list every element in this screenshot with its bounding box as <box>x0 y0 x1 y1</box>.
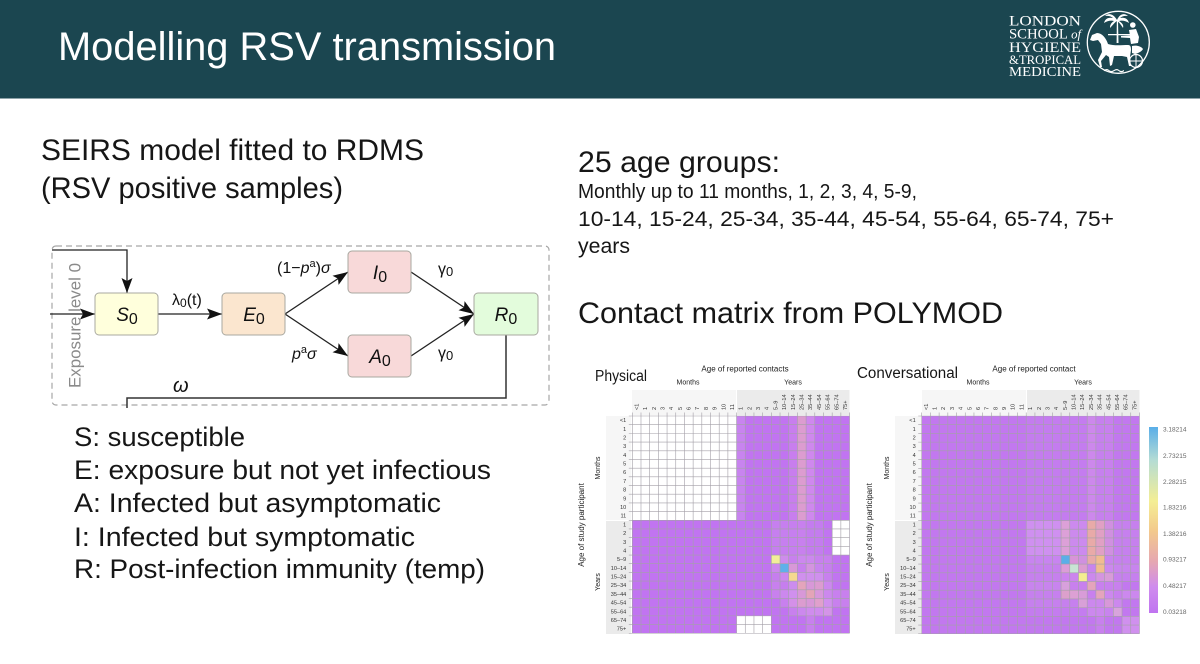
row and column age labels: 7 <box>913 479 916 485</box>
row and column age labels: 9 <box>913 496 916 502</box>
row and column age labels: 8 <box>913 488 916 494</box>
row and column age labels: 2 <box>623 531 626 537</box>
logo wordmark: HYGIENE <box>1009 40 1081 56</box>
row and column age labels: 2 <box>913 436 916 442</box>
axis titles: Years <box>595 573 602 591</box>
heatmap cells <box>629 413 850 633</box>
axis titles: Age of reported contacts <box>701 364 789 374</box>
row and column age labels: 2 <box>941 407 947 410</box>
row and column age labels: 6 <box>623 470 626 476</box>
rate labels: 0 <box>446 264 453 279</box>
row and column age labels: 4 <box>1054 407 1060 410</box>
compartment R: 0 <box>508 311 517 328</box>
frame label: exposure level: Exposure level 0 <box>66 263 84 388</box>
compartment definitions list: I: Infected but symptomatic <box>74 522 415 552</box>
compartment definitions list: S: susceptible <box>74 422 245 452</box>
row and column age labels: 5–9 <box>617 557 626 563</box>
row and column age labels: 2 <box>1037 407 1043 410</box>
row and column age labels <box>900 394 1138 633</box>
row and column age labels: 4 <box>669 407 675 410</box>
age group description: 10-14, 15-24, 25-34, 35-44, 45-54, 55-64, 65-74, 75+ <box>578 207 1114 231</box>
row and column age labels: 11 <box>620 514 626 520</box>
row and column age labels: 15–24 <box>791 394 797 410</box>
arrows between compartments <box>50 250 474 356</box>
row and column age labels: 11 <box>910 514 916 520</box>
row and column age labels: 1 <box>913 427 916 433</box>
row and column age labels: 3 <box>623 444 626 450</box>
row and column age labels: 75+ <box>1132 400 1138 410</box>
return arrow: waning immunity <box>127 335 506 408</box>
panel label: Physical: Physical <box>595 368 647 385</box>
logo wordmark: MEDICINE <box>1009 65 1081 80</box>
row and column age labels: 4 <box>913 548 916 554</box>
row and column age labels: 1 <box>643 407 649 410</box>
row and column age labels: 25–34 <box>611 583 626 589</box>
header bands <box>895 390 1140 634</box>
axis titles: Years <box>784 380 802 386</box>
compartment E <box>222 293 285 335</box>
row and column age labels: 1 <box>623 427 626 433</box>
rate labels: (1−p <box>277 260 309 277</box>
row and column age labels: 2 <box>747 407 753 410</box>
axis titles: Months <box>884 456 891 479</box>
rate labels: λ <box>172 292 180 309</box>
row and column age labels: <1 <box>924 404 930 410</box>
rate labels: σ <box>307 346 318 363</box>
colour bar <box>1149 427 1158 613</box>
row and column age labels: 25–34 <box>900 583 916 589</box>
heading: SEIRS model <box>41 134 424 205</box>
compartment R <box>474 293 538 335</box>
rate labels: 0 <box>180 296 187 310</box>
logo wordmark: &TROPICAL <box>1009 53 1081 67</box>
row and column age labels: 65–74 <box>900 618 916 624</box>
row and column age labels: 35–44 <box>900 592 916 598</box>
axis titles: Age of study participant <box>865 482 874 567</box>
row and column age labels: 4 <box>765 407 771 410</box>
axis titles: Years <box>1074 380 1092 386</box>
rate labels: a <box>309 258 316 270</box>
row and column age labels: 10 <box>909 505 916 511</box>
row and column age labels: 55–64 <box>826 394 832 410</box>
rate labels: (t) <box>187 292 202 309</box>
row and column age labels: 6 <box>686 407 692 410</box>
row and column age labels: 15–24 <box>900 574 916 580</box>
row and column age labels: 45–54 <box>817 394 823 410</box>
heatmap cells <box>918 413 1139 634</box>
rate labels: γ <box>438 261 446 278</box>
row and column age labels: 1 <box>913 522 916 528</box>
row and column age labels: 4 <box>623 548 626 554</box>
row and column age labels: 5 <box>913 462 916 468</box>
colour scale values: 0.48217 <box>1163 583 1187 590</box>
row and column age labels: 35–44 <box>808 394 814 410</box>
compartment definitions list: R: Post-infection immunity (temp) <box>74 554 485 584</box>
rate labels <box>172 258 453 397</box>
row and column age labels: 5–9 <box>1063 401 1069 410</box>
compartment S <box>95 293 158 335</box>
row and column age labels: 65–74 <box>834 394 840 410</box>
row and column age labels: 7 <box>695 407 701 410</box>
axis titles: Age of study participant <box>577 482 586 567</box>
row and column age labels: 15–24 <box>1080 394 1086 410</box>
axis titles: Months <box>595 456 602 479</box>
row and column age labels: 75+ <box>906 627 916 633</box>
compartment I: I <box>373 263 378 284</box>
compartment A: A <box>369 347 382 368</box>
row and column age labels: 45–54 <box>1106 394 1112 410</box>
row and column age labels: 10 <box>620 505 626 511</box>
row and column age labels: 3 <box>660 407 666 410</box>
axis titles <box>865 364 1092 591</box>
header bands <box>606 390 850 634</box>
header band <box>0 0 1200 98</box>
compartment E: 0 <box>256 311 265 328</box>
row and column age labels: 3 <box>913 444 916 450</box>
colour scale values: 1.83216 <box>1163 504 1187 512</box>
row and column age labels: 7 <box>623 479 626 485</box>
SEIRS compartment diagram <box>50 246 549 408</box>
colour scale values <box>1163 426 1187 616</box>
row and column age labels: 3 <box>950 407 956 410</box>
colour scale values: 0.93217 <box>1163 556 1187 564</box>
compartment A: 0 <box>382 353 391 370</box>
logo wordmark <box>1009 14 1083 80</box>
row and column age labels: 4 <box>913 453 916 459</box>
colour scale values: 3.18214 <box>1163 426 1187 434</box>
logo wordmark: LONDON <box>1009 14 1081 30</box>
row and column age labels: <1 <box>909 418 916 424</box>
row and column age labels: 5–9 <box>906 557 916 563</box>
row and column age labels: 15–24 <box>611 574 626 580</box>
axis titles: Months <box>677 380 700 386</box>
row and column age labels: 55–64 <box>1115 394 1121 410</box>
row and column age labels: <1 <box>634 404 640 410</box>
row and column age labels: 3 <box>1046 407 1052 410</box>
compartment A <box>348 335 411 377</box>
compartment definitions list: A: Infected but asymptomatic <box>74 488 441 518</box>
panel: conversational contact matrix <box>857 364 1140 634</box>
age group description: years <box>578 234 630 258</box>
row and column age labels: 9 <box>713 407 719 410</box>
row and column age labels: 6 <box>976 407 982 410</box>
row and column age labels: 75+ <box>843 400 849 410</box>
heading: SEIRS model: SEIRS model fitted to RDMS <box>41 134 424 167</box>
row and column age labels: 8 <box>704 407 710 410</box>
row and column age labels: 65–74 <box>1124 394 1130 410</box>
compartment definitions list: E: exposure but not yet infectious <box>74 455 491 485</box>
colour scale values: 0.03218 <box>1163 609 1187 616</box>
row and column age labels: 5 <box>623 462 626 468</box>
row and column age labels: 3 <box>913 540 916 546</box>
row and column age labels: 55–64 <box>611 609 626 615</box>
compartment S: S <box>116 305 129 326</box>
rate labels: γ <box>438 345 446 362</box>
row and column age labels: 35–44 <box>611 592 626 598</box>
row and column age labels: 5–9 <box>773 401 779 410</box>
row and column age labels: 10–14 <box>900 566 916 572</box>
row and column age labels: 10–14 <box>1072 394 1078 410</box>
row and column age labels: 5 <box>678 407 684 410</box>
compartment E: E <box>243 305 256 326</box>
axis titles: Years <box>884 573 891 591</box>
rate labels: σ <box>321 260 332 277</box>
row and column age labels: <1 <box>620 418 626 424</box>
row and column age labels: 1 <box>1028 407 1034 410</box>
panel: physical contact matrix <box>577 364 850 634</box>
row and column age labels: 8 <box>993 407 999 410</box>
row and column age labels: 1 <box>739 407 745 410</box>
rate labels: a <box>301 344 308 356</box>
row and column age labels: 1 <box>623 522 626 528</box>
row and column age labels: 3 <box>623 540 626 546</box>
row and column age labels: 1 <box>933 407 939 410</box>
row and column age labels: 25–34 <box>799 394 805 410</box>
logo roundel: horse, chariot and palm <box>1087 11 1149 73</box>
rate labels: ω <box>173 375 189 397</box>
rate labels: 0 <box>446 348 453 363</box>
axis titles <box>577 364 802 591</box>
title: Modelling RSV transmission <box>58 25 556 69</box>
compartment I <box>348 251 411 293</box>
age group description: Monthly up to 11 months, 1, 2, 3, 4, 5-9, <box>578 181 917 203</box>
row and column age labels: 45–54 <box>900 601 916 607</box>
row and column age labels: 10 <box>721 404 727 410</box>
colour scale values: 2.73215 <box>1163 453 1187 460</box>
row and column age labels: 55–64 <box>900 609 916 615</box>
rate labels: p <box>291 346 301 363</box>
heading: contact matrix: Contact matrix from POLYMOD <box>578 297 1003 330</box>
row and column age labels: 5 <box>967 407 973 410</box>
row and column age labels: 11 <box>730 404 736 410</box>
axis titles: Age of reported contact <box>992 364 1076 374</box>
row and column age labels: 6 <box>913 470 916 476</box>
panel label: Conversational: Conversational <box>857 365 958 382</box>
colour scale legend <box>1149 426 1187 616</box>
compartment definitions list <box>74 422 491 584</box>
row and column age labels: 10 <box>1011 404 1017 410</box>
logo: London School of Hygiene & Tropical Medicine <box>1009 11 1149 80</box>
logo wordmark: SCHOOL of <box>1009 26 1083 42</box>
row and column age labels: 11 <box>1019 404 1025 410</box>
row and column age labels: 35–44 <box>1098 394 1104 410</box>
rate labels: ) <box>316 260 321 277</box>
row and column age labels: 9 <box>623 496 626 502</box>
axis titles: Months <box>967 380 990 386</box>
row and column age labels <box>611 394 849 633</box>
compartment S: 0 <box>129 311 138 328</box>
compartment I: 0 <box>378 269 387 286</box>
row and column age labels: 4 <box>623 453 626 459</box>
row and column age labels: 25–34 <box>1089 394 1095 410</box>
row and column age labels: 3 <box>756 407 762 410</box>
row and column age labels: 7 <box>985 407 991 410</box>
row and column age labels: 2 <box>623 436 626 442</box>
age group description <box>578 181 1114 258</box>
heading: SEIRS model: (RSV positive samples) <box>41 172 343 205</box>
row and column age labels: 10–14 <box>782 394 788 410</box>
diagram frame <box>52 246 549 405</box>
colour scale values: 2.28215 <box>1163 479 1187 486</box>
row and column age labels: 45–54 <box>611 601 626 607</box>
row and column age labels: 10–14 <box>611 566 626 572</box>
heading: age groups: 25 age groups: <box>578 146 780 179</box>
compartment R: R <box>495 305 508 326</box>
row and column age labels: 65–74 <box>611 618 626 624</box>
row and column age labels: 2 <box>652 407 658 410</box>
colour scale values: 1.38216 <box>1163 531 1187 538</box>
row and column age labels: 9 <box>1002 407 1008 410</box>
row and column age labels: 8 <box>623 488 626 494</box>
row and column age labels: 75+ <box>617 627 626 633</box>
row and column age labels: 4 <box>959 407 965 410</box>
row and column age labels: 2 <box>913 531 916 537</box>
